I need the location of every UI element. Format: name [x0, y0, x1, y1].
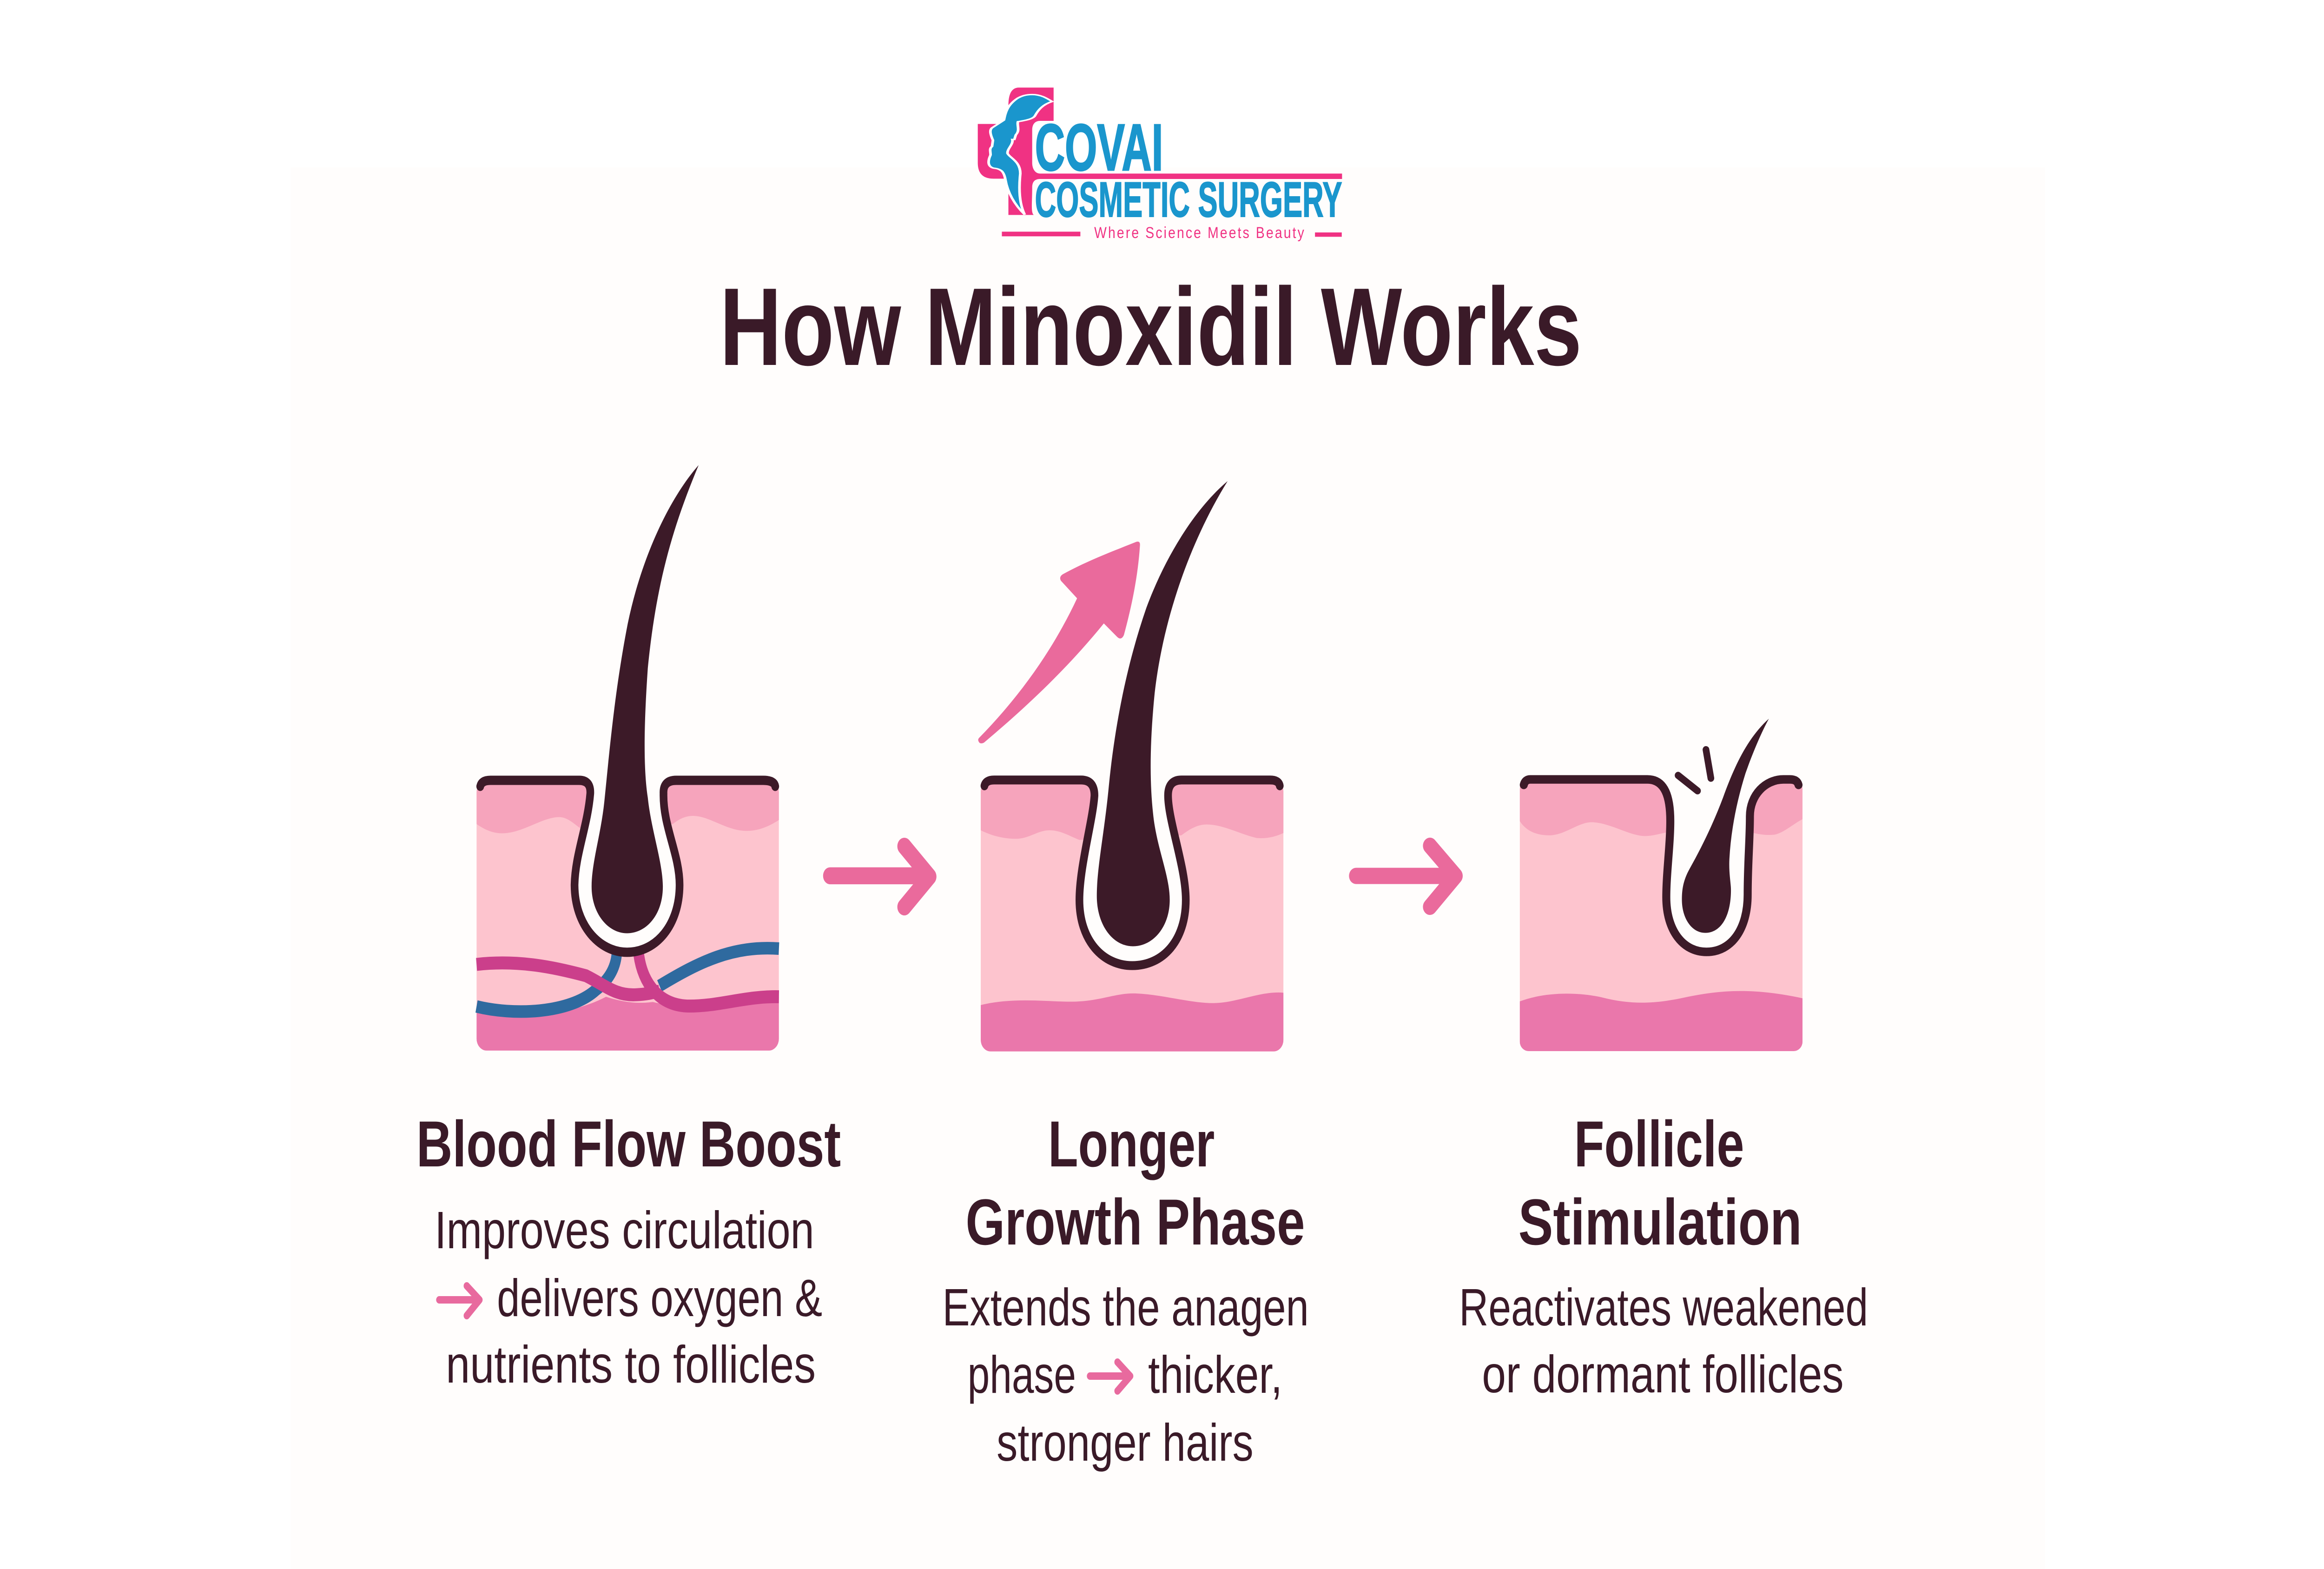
heading line: Longer: [1048, 1108, 1215, 1180]
icon: inline arrow: [439, 1286, 480, 1316]
heading line: Growth Phase: [966, 1186, 1305, 1258]
skin surface and follicle outline: [984, 780, 1280, 966]
hair strand: [1682, 719, 1769, 933]
heading line: Follicle: [1574, 1108, 1744, 1180]
text block: follicle stimulation: [1459, 1108, 1868, 1404]
logo: Covai Cosmetic Surgery: [978, 87, 1342, 242]
panel: longer growth phase illustration: [978, 481, 1456, 1052]
title: How Minoxidil Works: [720, 265, 1582, 389]
skin cross-section: [981, 776, 1283, 1052]
description line: Reactivates weakened: [1459, 1278, 1868, 1337]
logo wordmark: COSMETIC SURGERY: COSMETIC SURGERY: [1035, 172, 1342, 227]
heading: Blood Flow Boost: [416, 1108, 841, 1180]
description line: stronger hairs: [997, 1414, 1254, 1472]
description word: thicker,: [1148, 1346, 1282, 1404]
follicle opening: [1079, 776, 1186, 966]
panel: blood flow boost illustration: [476, 465, 930, 1051]
text block: longer growth phase: [943, 1108, 1309, 1472]
description line: Extends the anagen: [943, 1278, 1309, 1337]
heading line: Stimulation: [1519, 1186, 1802, 1258]
panel: follicle stimulation illustration: [1520, 719, 1802, 1051]
icon: pink cross and face profile: [978, 87, 1342, 237]
hair strand: [592, 465, 699, 933]
skin surface and follicle outline: [480, 780, 775, 952]
logo tagline: Where Science Meets Beauty: [1094, 224, 1304, 242]
icon: inline arrow: [1090, 1362, 1130, 1391]
follicle opening: [574, 776, 680, 952]
skin surface and follicle outline: [1524, 780, 1798, 952]
icon: stimulation spark lines: [1678, 750, 1711, 791]
description line: or dormant follicles: [1482, 1345, 1844, 1404]
blood vessels: magenta: [476, 955, 779, 1006]
skin cross-section: [1520, 775, 1802, 1051]
description word: phase: [968, 1346, 1076, 1404]
hair strand: [1097, 481, 1228, 947]
arrow: step one to step two: [830, 846, 930, 907]
arrow: upward growth: [978, 542, 1140, 743]
description line: nutrients to follicles: [446, 1336, 816, 1394]
follicle opening: [1647, 775, 1783, 952]
text block: blood flow boost: [416, 1108, 841, 1394]
blood vessels: blue: [476, 948, 779, 1012]
logo wordmark: COVAI: COVAI: [1035, 111, 1163, 184]
description line: Improves circulation: [435, 1201, 814, 1260]
description line: delivers oxygen &: [497, 1269, 822, 1328]
arrow: step two to step three: [1356, 846, 1456, 907]
skin cross-section: [476, 776, 779, 1051]
